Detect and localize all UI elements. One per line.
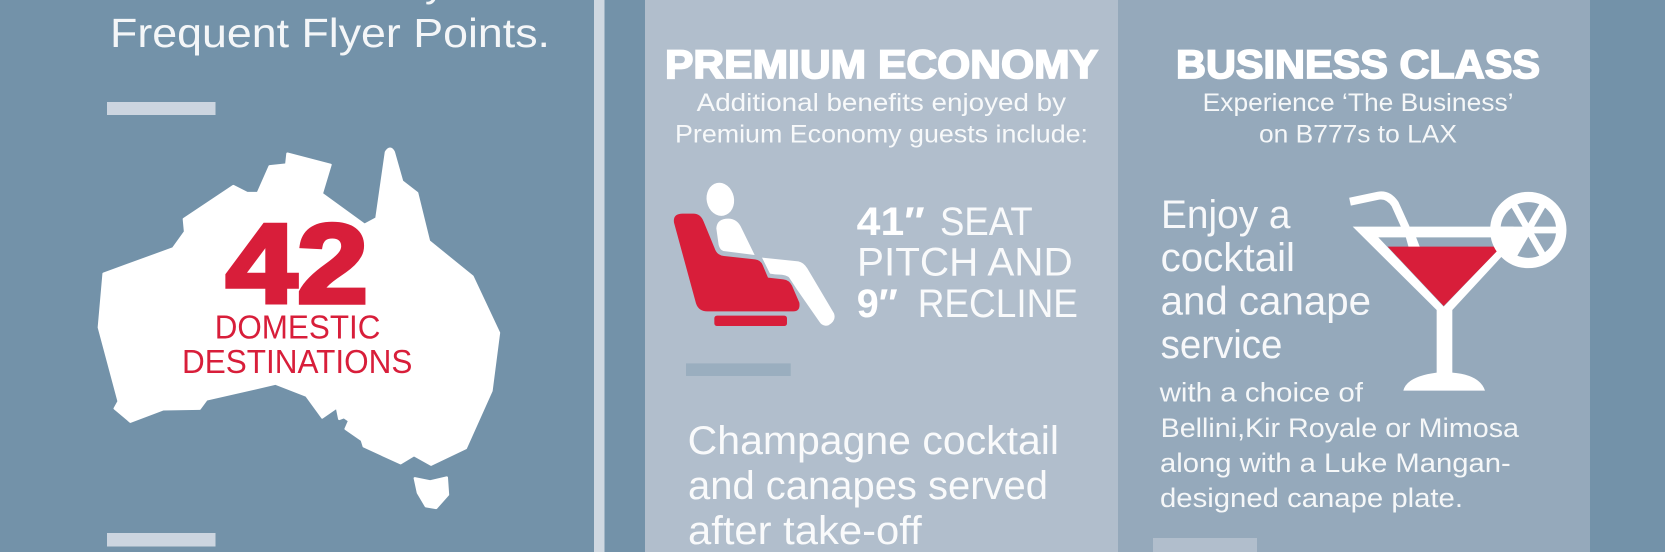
number: 42: 42 [226, 202, 368, 326]
text: champagne cocktail [688, 419, 1059, 552]
text: the business intro [1203, 89, 1514, 149]
text: frequent flyer points: Frequent Flyer Points. [110, 10, 550, 56]
text: cocktail choices and canape plate: designed canape plate. [1160, 483, 1463, 513]
text: additional benefits intro [675, 89, 1088, 149]
text: seat pitch and recline: 9″ [857, 282, 898, 326]
heading: business class: BUSINESS CLASS [1176, 43, 1540, 87]
icon: cocktail glass [1350, 195, 1561, 391]
text: champagne cocktail: Champagne cocktail [688, 419, 1059, 463]
text: cocktail choices and canape plate: along with a Luke Mangan- [1160, 448, 1511, 478]
text: the business intro: Experience ‘The Business’ [1203, 89, 1514, 117]
label: domestic destinations: DOMESTIC [215, 309, 380, 346]
text: cocktail choices and canape plate: Bellini,Kir Royale or Mimosa [1161, 413, 1520, 443]
map: Australia with destination count [99, 149, 499, 508]
divider bar: lower [107, 533, 216, 546]
text: champagne cocktail: after take-off [688, 509, 923, 552]
text: additional benefits intro: Premium Economy guests include: [675, 121, 1088, 149]
text: seat pitch and recline: SEAT [940, 200, 1033, 244]
text: cocktail and canape service: cocktail [1161, 236, 1295, 280]
text: seat pitch and recline: PITCH AND [857, 241, 1073, 285]
panel: business class [1118, 0, 1590, 552]
text: champagne cocktail: and canapes served [688, 464, 1048, 508]
text: cocktail choices and canape plate [1159, 377, 1520, 513]
divider bar: premium economy [686, 363, 791, 376]
icon: passenger in reclined seat [674, 180, 835, 326]
panel: domestic network [99, 0, 550, 546]
label: domestic destinations [182, 309, 412, 380]
text: cocktail and canape service: service [1161, 323, 1282, 367]
divider bar: upper [107, 102, 216, 115]
vertical divider [594, 0, 604, 552]
text: seat pitch and recline: RECLINE [918, 282, 1078, 326]
text: cocktail and canape service [1161, 193, 1371, 367]
text: seat pitch and recline: 41″ [857, 200, 925, 244]
divider bar: business class [1153, 538, 1257, 552]
label: domestic destinations: DESTINATIONS [182, 343, 412, 380]
panel: premium economy [645, 0, 1118, 552]
icon: Australia mainland and Tasmania [99, 149, 499, 508]
heading: premium economy: PREMIUM ECONOMY [665, 43, 1098, 87]
text: cocktail choices and canape plate: with a choice of [1159, 377, 1364, 407]
text: seat pitch and recline [857, 200, 1078, 326]
text: additional benefits intro: Additional benefits enjoyed by [697, 89, 1067, 117]
text: cocktail and canape service: and canape [1161, 279, 1371, 323]
text: the business intro: on B777s to LAX [1259, 121, 1457, 149]
text: cocktail and canape service: Enjoy a [1161, 193, 1291, 237]
